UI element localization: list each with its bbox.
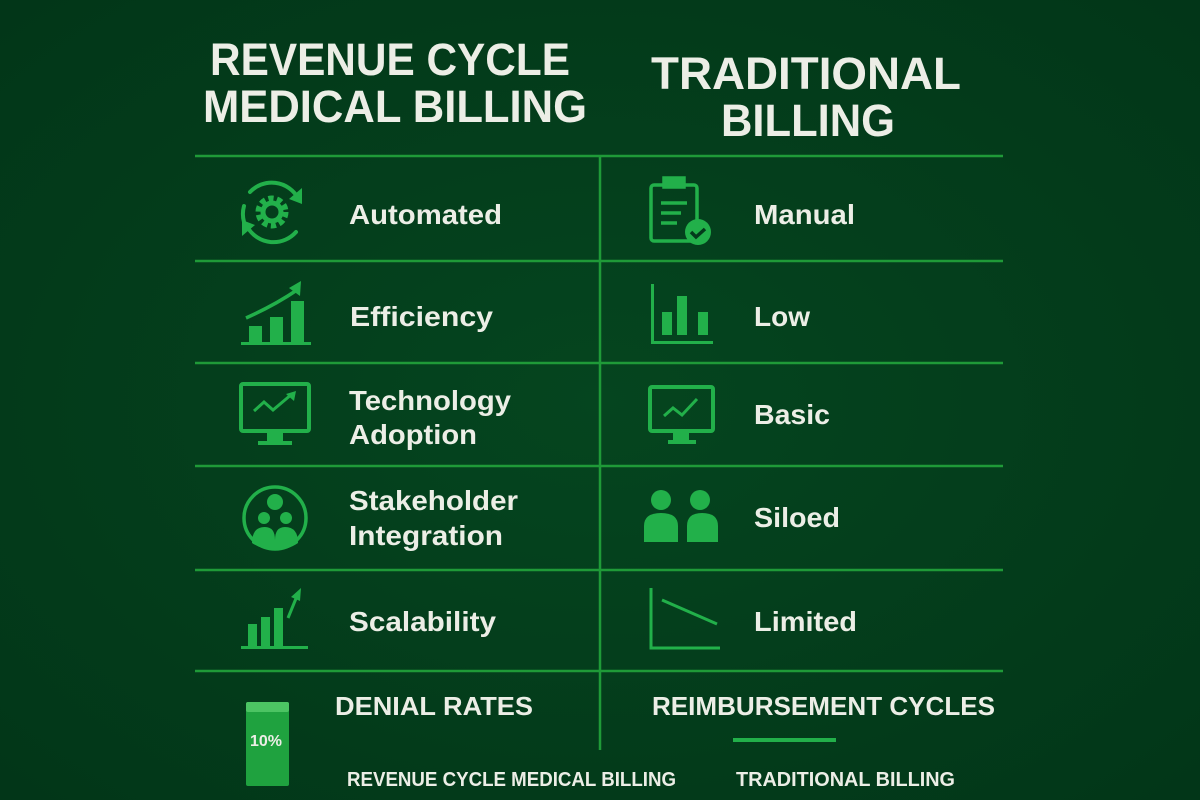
icon: siloed people — [644, 490, 718, 542]
heading: Denial Rates: DENIAL RATES — [335, 691, 533, 721]
icon: monitor with trend — [241, 384, 309, 443]
title: right column header: TRADITIONAL — [651, 48, 961, 99]
label: Technology Adoption: Technology — [349, 385, 511, 416]
icon: basic monitor — [650, 387, 713, 442]
icon: integrated stakeholders circle — [244, 487, 306, 550]
label: Siloed: Siloed — [754, 502, 840, 533]
label: Manual: Manual — [754, 199, 855, 230]
icon: low bar chart — [651, 284, 713, 344]
label: Stakeholder Integration: Integration — [349, 520, 503, 551]
legend: traditional billing: TRADITIONAL BILLING — [736, 769, 955, 791]
label: Efficiency: Efficiency — [350, 301, 493, 332]
title: left column header — [203, 34, 587, 132]
label: Scalability: Scalability — [349, 606, 496, 637]
chart: denial rate bar 10% — [246, 702, 289, 786]
label: Basic: Basic — [754, 399, 830, 430]
marker: reimbursement line — [733, 738, 836, 742]
chart: denial rate bar 10%: 10% — [250, 733, 282, 750]
heading: Reimbursement Cycles: REIMBURSEMENT CYCLES — [652, 691, 995, 721]
icon: rising bar chart — [241, 281, 311, 345]
label: Automated: Automated — [349, 199, 502, 230]
title: left column header: REVENUE CYCLE — [210, 34, 570, 85]
icon: declining line — [651, 588, 720, 648]
icon: automation gear cycle — [242, 183, 302, 242]
label: Limited: Limited — [754, 606, 857, 637]
icon: scalability bars — [241, 588, 308, 649]
label: Stakeholder Integration — [349, 485, 518, 551]
title: right column header — [651, 48, 961, 146]
title: left column header: MEDICAL BILLING — [203, 81, 587, 132]
label: Technology Adoption: Adoption — [349, 419, 477, 450]
legend: revenue cycle medical billing: REVENUE CYCLE MEDICAL BILLING — [347, 769, 676, 791]
title: right column header: BILLING — [721, 95, 895, 146]
icon: clipboard check — [651, 178, 711, 245]
label: Stakeholder Integration: Stakeholder — [349, 485, 518, 516]
label: Low: Low — [754, 301, 810, 332]
label: Technology Adoption — [349, 385, 511, 450]
